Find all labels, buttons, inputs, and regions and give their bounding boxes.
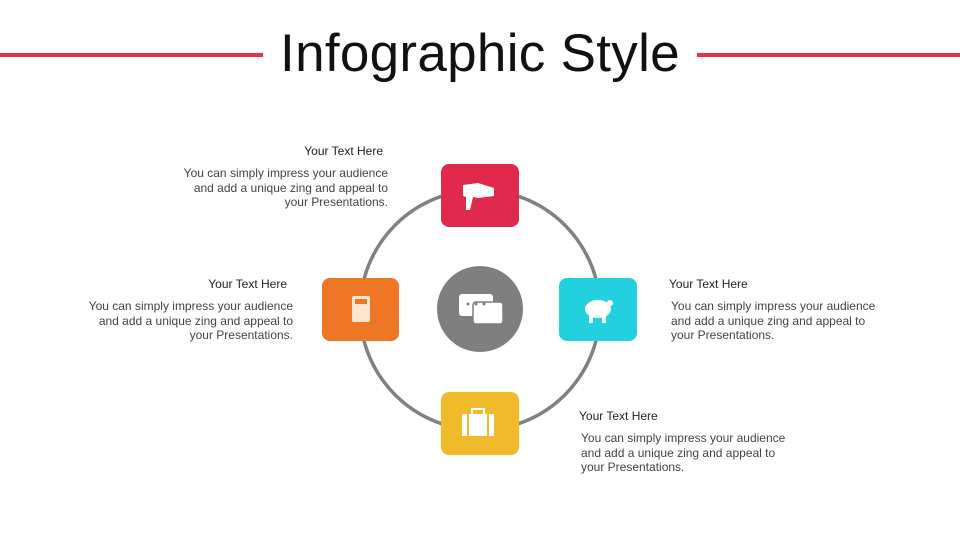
text: right: Your Text Here xyxy=(669,277,748,291)
text: right: and add a unique zing and appeal to xyxy=(671,314,865,328)
text: right xyxy=(669,277,875,342)
text: top: You can simply impress your audience xyxy=(184,166,388,180)
text: bottom xyxy=(579,409,785,474)
icon: calculator xyxy=(322,278,399,341)
text: left: your Presentations. xyxy=(190,328,293,342)
text: bottom: and add a unique zing and appeal to xyxy=(581,446,775,460)
text: right: You can simply impress your audience xyxy=(671,299,875,313)
icon: megaphone xyxy=(441,164,519,227)
text: top: your Presentations. xyxy=(285,195,388,209)
text: left: and add a unique zing and appeal to xyxy=(99,314,293,328)
icon: center chat xyxy=(437,266,523,352)
text: bottom: your Presentations. xyxy=(581,460,684,474)
text: top: Your Text Here xyxy=(304,144,383,158)
text: top: and add a unique zing and appeal to xyxy=(194,180,388,194)
text: left xyxy=(89,277,293,342)
title: Infographic Style xyxy=(280,24,680,83)
text: bottom: Your Text Here xyxy=(579,409,658,423)
text: top xyxy=(184,144,388,209)
text: left: Your Text Here xyxy=(208,277,287,291)
text: bottom: You can simply impress your audience xyxy=(581,431,785,445)
icon: briefcase xyxy=(441,392,519,455)
icon: piggy bank xyxy=(559,278,637,341)
text: left: You can simply impress your audience xyxy=(89,299,293,313)
text: right: your Presentations. xyxy=(671,328,774,342)
